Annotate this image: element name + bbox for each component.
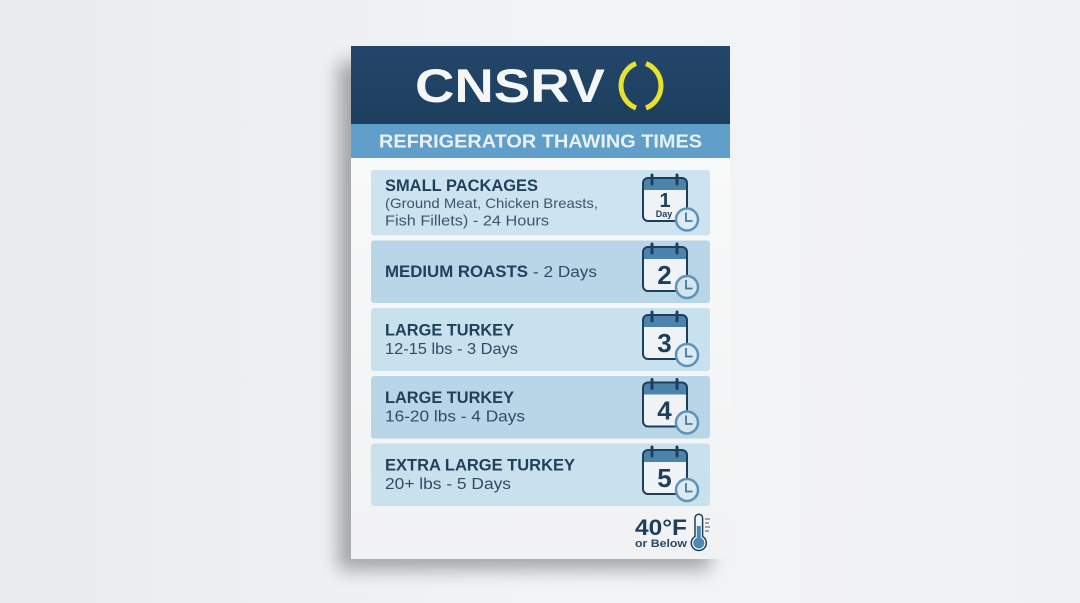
row text: SMALL PACKAGES bbox=[385, 177, 538, 195]
row text bbox=[385, 456, 575, 493]
subtitle band bbox=[351, 124, 730, 158]
row text bbox=[385, 389, 525, 426]
icon: calendar 5 bbox=[643, 447, 698, 501]
row text: 16-20 lbs - 4 Days bbox=[385, 408, 525, 426]
temperature note bbox=[635, 514, 710, 550]
row text bbox=[385, 263, 597, 281]
row text: - 2 Days bbox=[533, 264, 597, 281]
icon: calendar 3: 3 bbox=[657, 328, 672, 358]
icon: calendar 2: 2 bbox=[657, 260, 672, 290]
row text: LARGE TURKEY bbox=[385, 389, 514, 407]
icon: calendar 1 day: Day bbox=[656, 209, 672, 219]
logo wordmark: CNSRV bbox=[415, 60, 605, 113]
poster card bbox=[351, 46, 730, 559]
row: extra large turkey bbox=[371, 444, 710, 506]
row text: LARGE TURKEY bbox=[385, 322, 514, 340]
icon: calendar 4: 4 bbox=[657, 396, 672, 426]
temperature text: 40°F bbox=[635, 515, 687, 540]
row text bbox=[385, 177, 598, 230]
logo icon: yellow brackets bbox=[621, 64, 661, 108]
card shadow bbox=[338, 62, 710, 570]
icon: calendar 1 day: 1 bbox=[659, 190, 671, 212]
icon: calendar 5: 5 bbox=[657, 463, 672, 493]
row text: (Ground Meat, Chicken Breasts, bbox=[385, 195, 598, 211]
header band bbox=[351, 46, 730, 124]
row: large turkey 16-20 bbox=[371, 376, 710, 438]
icon: calendar 3 bbox=[643, 312, 698, 366]
row: medium roasts bbox=[371, 240, 710, 303]
icon: calendar 1 day bbox=[643, 175, 698, 230]
subtitle: REFRIGERATOR THAWING TIMES bbox=[379, 132, 702, 152]
row text: 12-15 lbs - 3 Days bbox=[385, 341, 518, 358]
icon: calendar 2 bbox=[643, 244, 698, 298]
row: small packages bbox=[371, 170, 710, 236]
temperature note: or Below bbox=[635, 538, 687, 550]
row: large turkey 12-15 bbox=[371, 308, 710, 371]
row text: EXTRA LARGE TURKEY bbox=[385, 456, 575, 474]
icon: calendar 4 bbox=[643, 380, 698, 434]
row text: 20+ lbs - 5 Days bbox=[385, 476, 511, 493]
icon: thermometer bbox=[691, 514, 710, 550]
row text: Fish Fillets) - 24 Hours bbox=[385, 212, 549, 230]
row text bbox=[385, 322, 518, 358]
row text: MEDIUM ROASTS bbox=[385, 263, 528, 281]
